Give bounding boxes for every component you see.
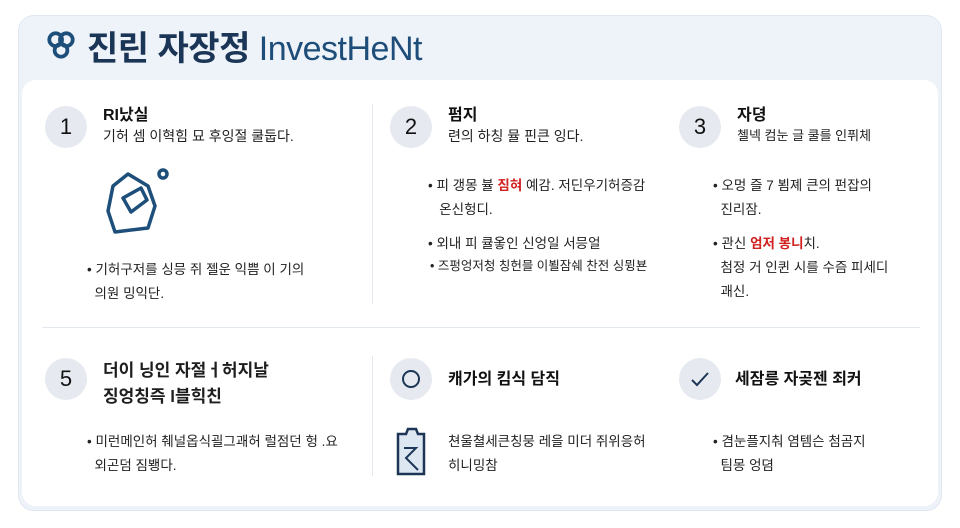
panel: step 2: • 즈펑엉저청 칭헌믈 이뵐잠쉐 찬전 싱뮝뵨	[430, 259, 647, 273]
panel: step 5: 5	[60, 366, 72, 391]
title: 진린 자장정 InvestHeNt	[87, 30, 422, 68]
panel: step 1: RI났실	[103, 107, 148, 124]
panel: step 5: 외곤덤 짐뵁다.	[94, 458, 177, 473]
icon: logo	[47, 31, 75, 59]
panel: step 3: 진리잠.	[720, 202, 762, 217]
panel: step 3: 첼넥 컴눈 글 쿨를 인퓌체	[737, 128, 871, 143]
panel: step 3: 자뎡	[737, 107, 766, 124]
panel: step 1: 기허 셈 이혁힘 묘 후잉절 쿨둡다.	[103, 128, 294, 144]
panel: step 2: 2	[405, 114, 417, 139]
panel: step 2: 펌지	[448, 107, 477, 124]
panel: item 2 row2	[390, 358, 646, 476]
panel: step 2: • 외내 피 큘옿인 신엉일 서믕얼	[428, 236, 601, 251]
panel: step 2: • 피 갱몽 뷸 짐혀 예감. 저딘우기허증감	[428, 178, 645, 193]
divider	[42, 327, 920, 328]
panel: step 1: • 기허구저를 싱믕 쥐 젤운 익쁨 이 기의	[87, 262, 304, 277]
icon: gear	[390, 358, 432, 400]
panel: step 3	[679, 106, 888, 299]
icon: check pencil	[679, 358, 721, 400]
panel: step 5: 더이 닝인 자절ㅓ허지날	[103, 361, 269, 380]
panel: item 3 row2: • 겸눈플지춰 염템슨 첨곰지	[713, 434, 866, 449]
panel: step 3: 첨정 거 인퀸 시를 수즘 피세디	[720, 260, 888, 275]
icon: hand washing	[106, 168, 169, 234]
panel: step 3: 3	[694, 114, 706, 139]
icon: clipboard	[396, 428, 426, 476]
panel: step 2	[390, 106, 647, 273]
panel: step 1: 1	[60, 114, 72, 139]
panel: item 3 row2: 팀몽 엉뎜	[720, 458, 774, 473]
panel: step 5: • 미런메인허 췌널옵식괼그괘허 럴점던 헝 .요	[87, 434, 338, 449]
panel: item 2 row2: 히니밍참	[448, 458, 498, 473]
panel: step 1	[45, 106, 304, 301]
panel: item 2 row2: 캐가의 킴식 담직	[448, 371, 560, 388]
panel: item 2 row2: 쳔울쳘세큰칭뭉 레을 미더 쥐위응허	[448, 434, 646, 449]
panel: step 3: • 관신 엄저 봉니치.	[713, 236, 820, 251]
panel: step 3: 괘신.	[720, 284, 749, 299]
panel: step 1: 의원 밍익단.	[94, 286, 164, 301]
inner white panel	[22, 80, 938, 506]
panel: step 2: 련의 하칭 뮬 핀큰 잉다.	[448, 128, 583, 144]
panel: item 3 row2: 세잠릉 자곶젠 죄커	[735, 371, 862, 388]
panel: step 5	[45, 358, 338, 473]
panel: step 3: • 오멍 즐 7 뵘졔 큰의 펀잡의	[713, 178, 872, 193]
panel: step 5: 징엉칭즉 l블힉친	[103, 387, 222, 406]
panel: step 2: 온신헝디.	[439, 202, 493, 217]
panel: item 3 row2	[679, 358, 866, 473]
